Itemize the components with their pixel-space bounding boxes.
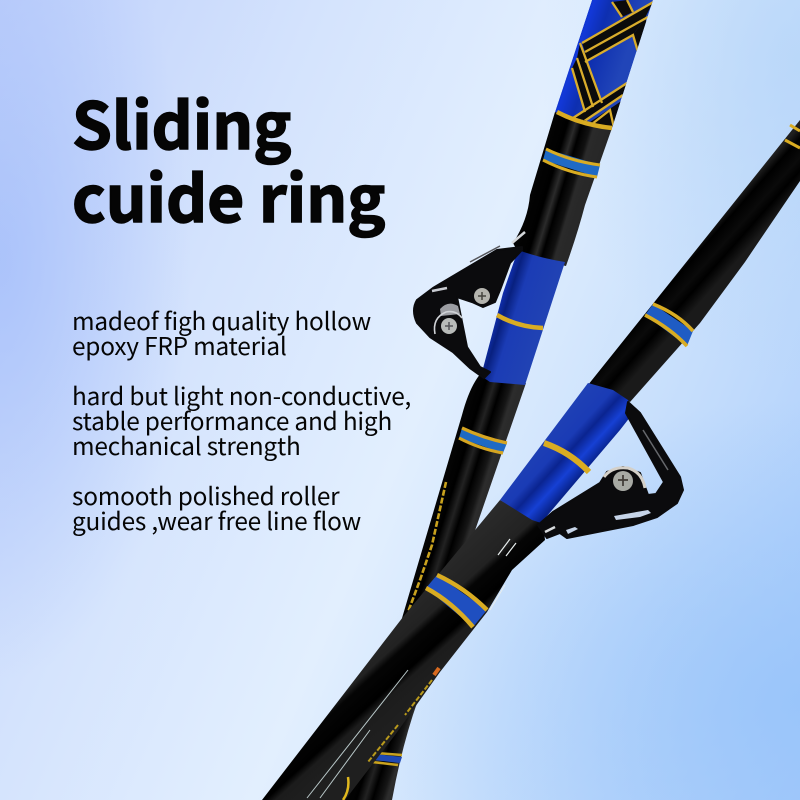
text block: performance: [72, 378, 411, 463]
guide 1 frame: [414, 232, 525, 378]
guide 1 screws: [474, 288, 490, 304]
rod 1 low ring: [373, 754, 402, 763]
text block: performance: stable performance and high: [72, 403, 392, 438]
rods illustration: [262, 0, 800, 800]
text block: roller guides: [72, 478, 361, 538]
rod 1 blue guide wrap: [481, 250, 565, 385]
rod 1 upper section: [513, 0, 655, 266]
rod 2 upper gold and blue ring: [645, 304, 693, 346]
rod 2 upper section: [588, 120, 800, 402]
title: cuide ring: [72, 149, 385, 241]
rod 2 blue guide wrap: [500, 383, 634, 523]
guide 2 screw: [613, 471, 633, 491]
rod 1 gold and blue ring: [543, 149, 600, 177]
text block: material: madeof figh quality hollow: [72, 303, 371, 338]
guide 2 roller edge: [604, 468, 645, 488]
text block: material: epoxy FRP material: [72, 328, 287, 363]
guide 2 frame: [538, 402, 683, 538]
text block: performance: hard but light non-conductive,: [72, 378, 411, 413]
rod 2 tip ring: [785, 125, 800, 148]
rod 1 gold lettering: [408, 482, 446, 612]
wrap gold lines: [572, 0, 655, 128]
text block: material: [72, 303, 371, 363]
text block: roller guides: guides ,wear free line flow: [72, 503, 361, 538]
guide 2 slot: [614, 510, 651, 520]
guide 1 roller: [440, 304, 460, 316]
blue blank with woven wrap: [555, 0, 655, 128]
title: [72, 76, 386, 241]
text block: performance: mechanical strength: [72, 428, 301, 463]
rod 2 gold lettering: [368, 680, 432, 762]
rod 2 lower gold and blue ring: [426, 575, 487, 627]
rod 1 gold and blue ring: [459, 428, 507, 453]
rod 2 lower section: [262, 500, 545, 800]
wrap black bands: [572, 0, 653, 128]
rod 1 lower section: [345, 372, 526, 800]
text block: roller guides: somooth polished roller: [72, 478, 339, 513]
rod 2 highlights: [307, 670, 408, 798]
title: Sliding: [72, 76, 291, 168]
